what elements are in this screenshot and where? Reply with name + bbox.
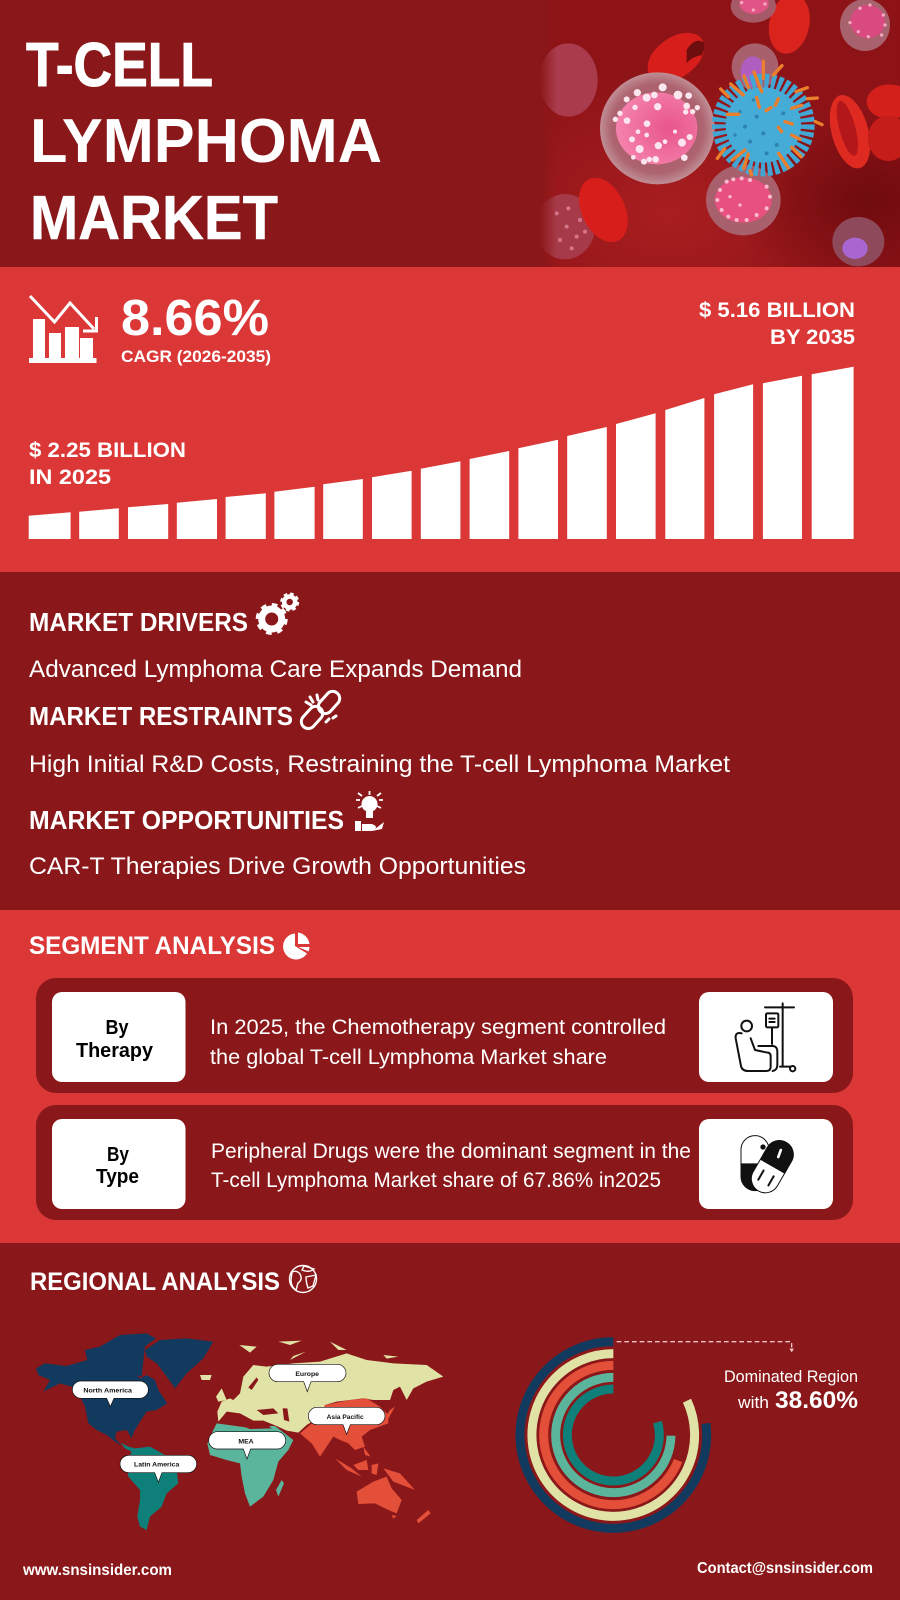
callout: latin america (120, 1455, 197, 1482)
heading: regional analysis: REGIONAL ANALYSIS (30, 1268, 280, 1296)
big cell (600, 72, 715, 184)
callout: asia pacific: Asia Pacific (327, 1414, 364, 1421)
text: therapy description (210, 1016, 666, 1069)
icon: declining chart (29, 296, 96, 363)
radial bar chart (520, 1342, 794, 1528)
text: type description: T-cell Lymphoma Market share of 67.86% in2025 (211, 1169, 661, 1192)
text: type description (211, 1140, 691, 1192)
dominated region callout: with (737, 1393, 769, 1412)
label box: by type: By (107, 1143, 129, 1166)
icon box: capsules (699, 1119, 833, 1209)
region: europe and russia (200, 1341, 443, 1433)
top cells (731, 0, 776, 23)
icon: broken chain (298, 689, 343, 731)
start value: $ 2.25 BILLION (29, 439, 186, 462)
bottom right cell (832, 217, 884, 266)
callout: mea (209, 1432, 286, 1459)
callout: north america: North America (83, 1387, 132, 1394)
footer: contact: Contact@snsinsider.com (697, 1560, 873, 1577)
heading: market restraints: MARKET RESTRAINTS (29, 701, 293, 731)
title: T-CELL (26, 31, 213, 100)
label box: by therapy (52, 992, 186, 1082)
callout: north america (72, 1381, 148, 1407)
dominated region callout: Dominated Region (724, 1367, 858, 1386)
callout: mea: MEA (238, 1438, 254, 1445)
text: type description: Peripheral Drugs were the dominant segment in the (211, 1140, 691, 1163)
icon box: infusion chair (699, 992, 833, 1082)
heading: market drivers: MARKET DRIVERS (29, 607, 248, 637)
heading: segment analysis: SEGMENT ANALYSIS (29, 932, 275, 960)
icon: hand with light bulb (355, 791, 384, 831)
dashed leader arrow (617, 1342, 794, 1352)
region: asia pacific (300, 1398, 431, 1523)
panel: segment analysis (0, 910, 900, 1243)
purple cell behind virus (732, 43, 778, 90)
icon: pie chart (283, 932, 310, 959)
dominated region callout: 38.60% (775, 1387, 858, 1414)
title: LYMPHOMA (30, 107, 382, 176)
faint cells (539, 43, 598, 117)
heading: market opportunities: MARKET OPPORTUNITIES (29, 805, 344, 835)
label box: by therapy: By (106, 1016, 129, 1039)
callout: europe: Europe (295, 1371, 319, 1378)
card: by type (36, 1105, 853, 1220)
hero illustration: blood cells and virus (500, 0, 900, 267)
title (26, 31, 382, 253)
dominated region callout (724, 1367, 858, 1414)
text: restraint: High Initial R&D Costs, Restraining the T-cell Lymphoma Market (29, 751, 730, 778)
header panel (26, 0, 900, 267)
label box: by therapy: Therapy (76, 1039, 154, 1062)
text: opportunity: CAR-T Therapies Drive Growth Opportunities (29, 853, 526, 880)
end value (699, 299, 855, 349)
label box: by type: Type (96, 1165, 139, 1188)
text: driver: Advanced Lymphoma Care Expands Demand (29, 656, 522, 683)
callout: latin america: Latin America (134, 1462, 180, 1469)
text: therapy description: In 2025, the Chemotherapy segment controlled (210, 1016, 666, 1039)
bottom cell (706, 165, 781, 235)
region: middle east and africa (207, 1423, 293, 1507)
icon: gears (258, 594, 298, 633)
world map (36, 1333, 443, 1530)
panel: market dynamics (29, 594, 730, 880)
panel: market size (0, 267, 900, 572)
start value: IN 2025 (29, 466, 111, 489)
icon: globe (290, 1266, 316, 1292)
region: latin america (121, 1443, 178, 1530)
end value: BY 2035 (770, 326, 855, 349)
red blood cells (639, 23, 713, 92)
footer: website: www.snsinsider.com (22, 1562, 172, 1579)
panel: regional analysis (30, 1266, 858, 1530)
card: by therapy (36, 978, 853, 1093)
callout: asia pacific (308, 1407, 385, 1434)
bar chart (29, 367, 854, 539)
start value (29, 439, 186, 489)
label box: by type (52, 1119, 186, 1209)
callout: europe (269, 1364, 346, 1392)
text: therapy description: the global T-cell Lymphoma Market share (210, 1046, 607, 1069)
region: north america (36, 1333, 213, 1446)
title: MARKET (30, 184, 278, 253)
CAGR value: 8.66% (121, 289, 269, 346)
CAGR label: CAGR (2026-2035) (121, 348, 271, 366)
virus (720, 81, 807, 169)
end value: $ 5.16 BILLION (699, 299, 855, 322)
